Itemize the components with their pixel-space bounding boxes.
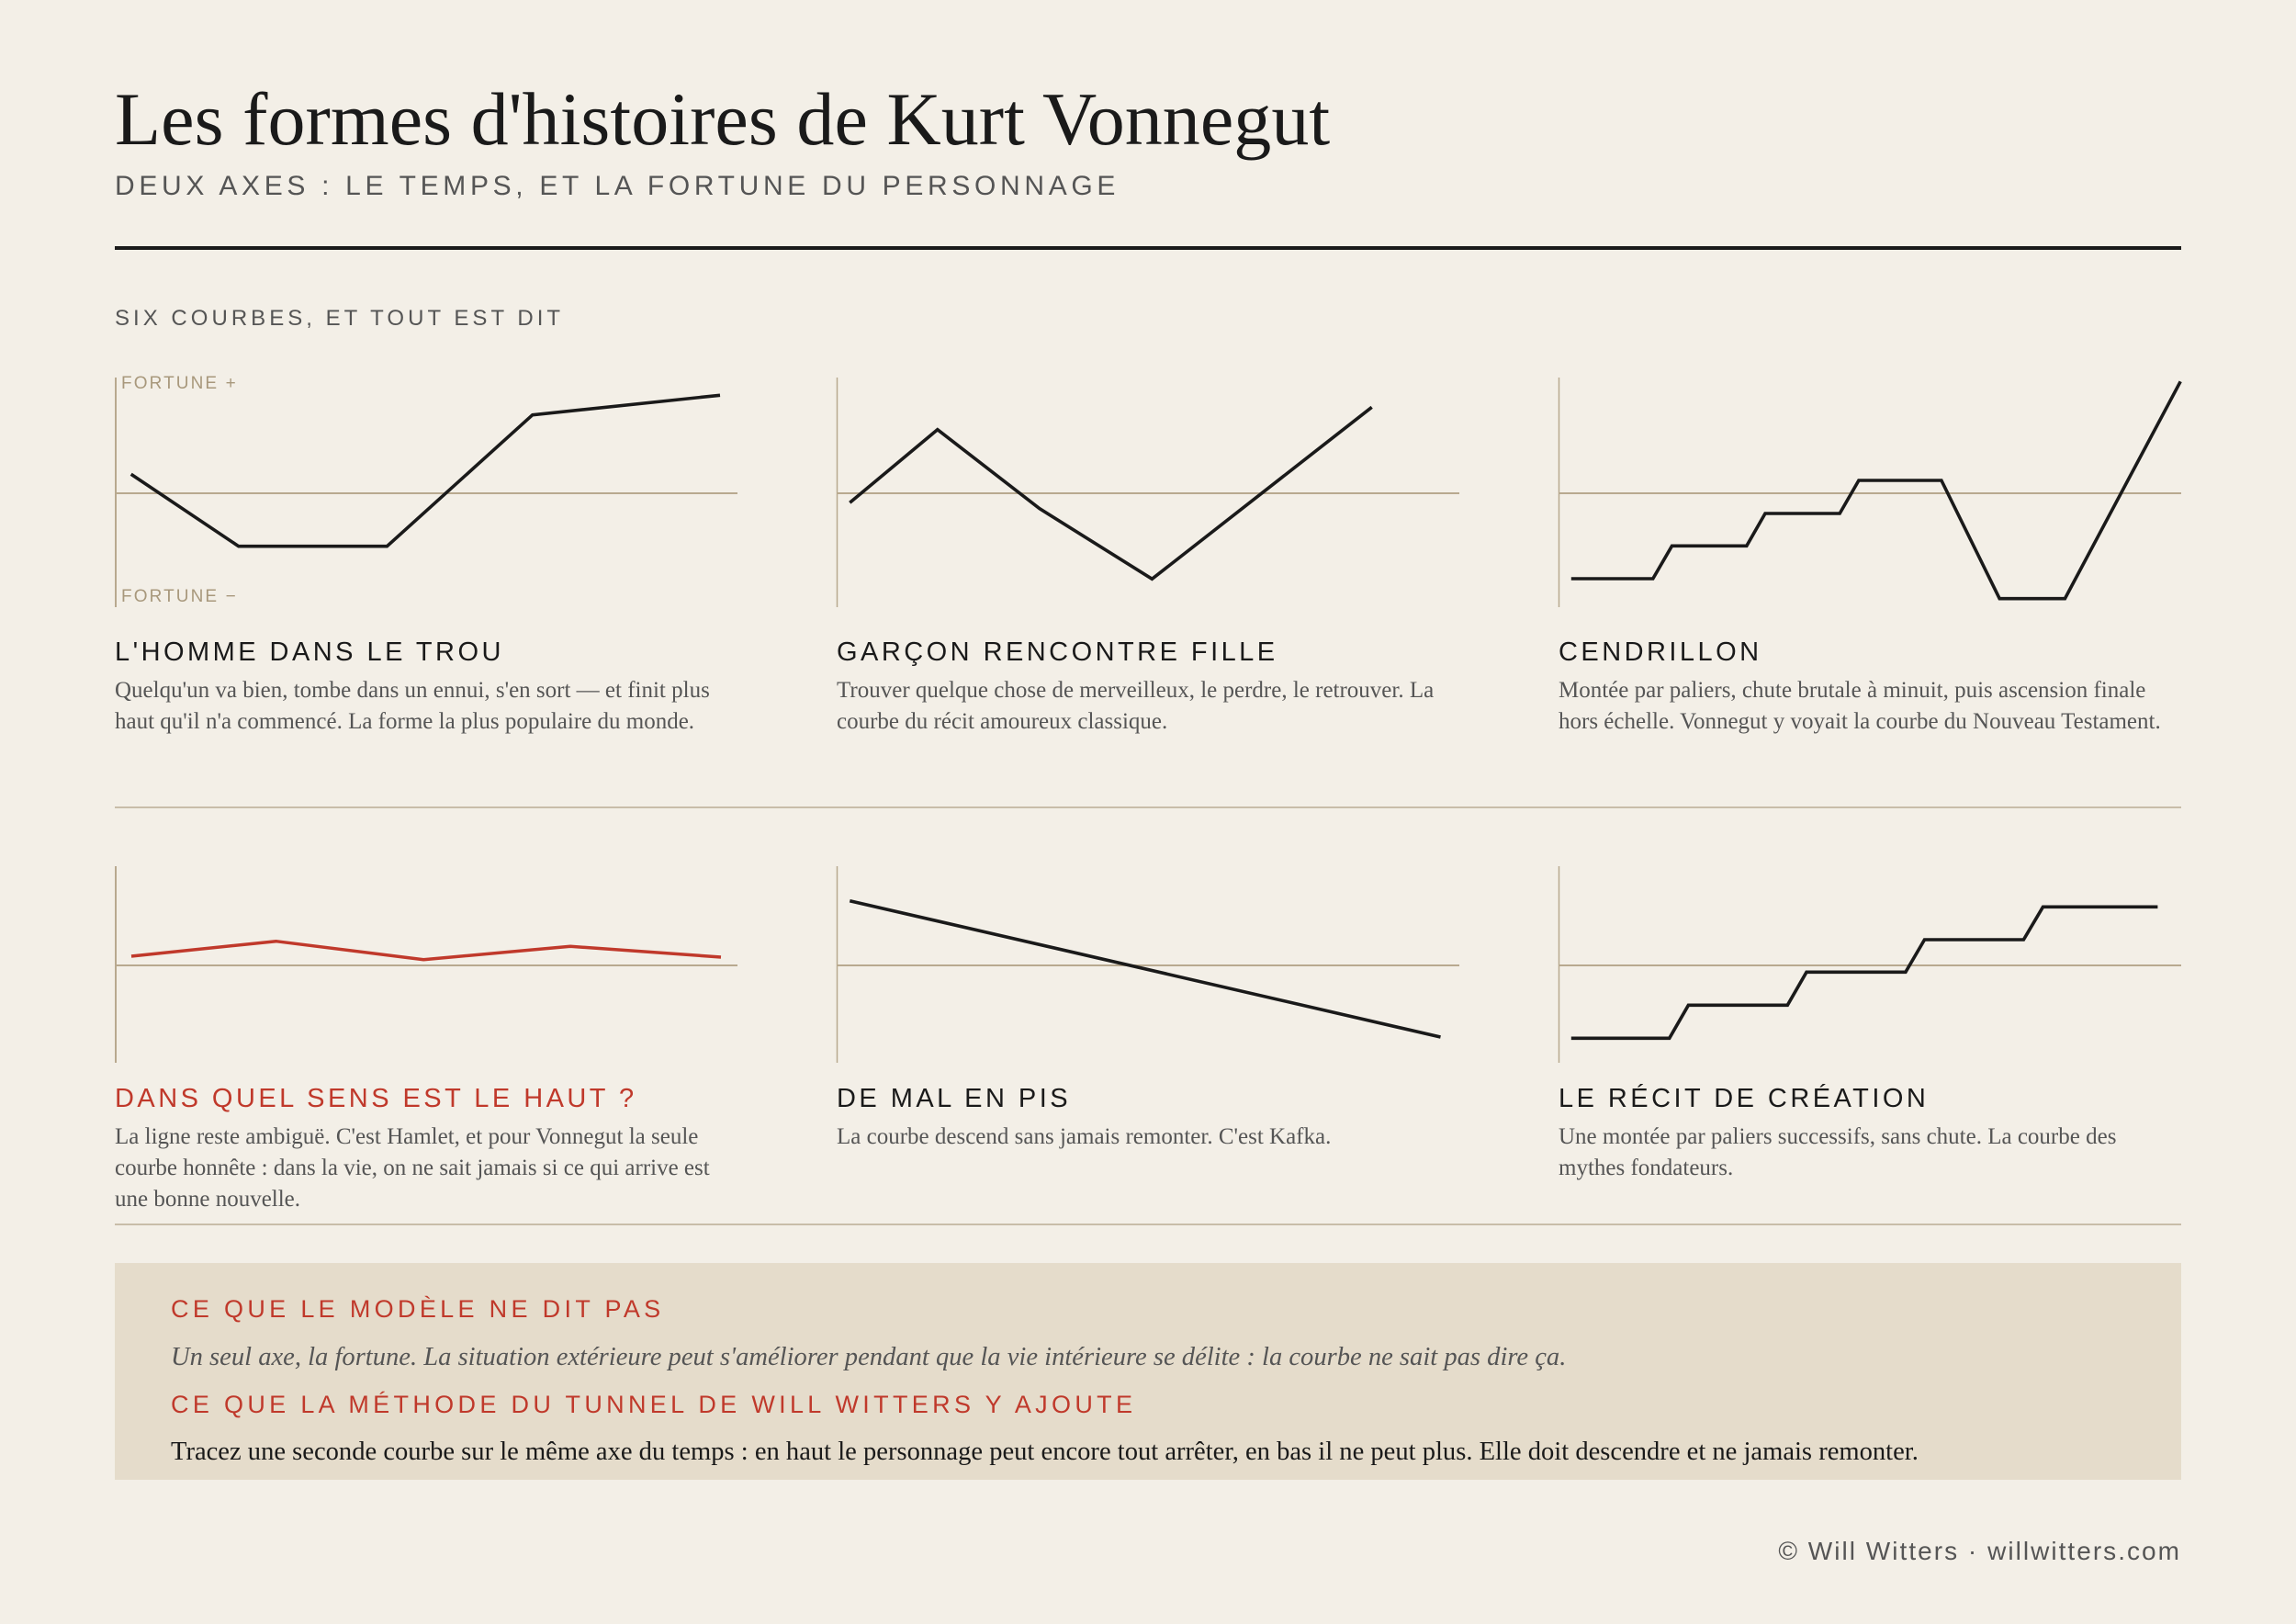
chart: Cendrillon curve <box>1558 378 2182 607</box>
footer credit: © Will Witters · willwitters.com <box>1778 1537 2181 1565</box>
axes <box>837 866 1459 1063</box>
panel: Cendrillon <box>1558 378 2182 734</box>
curve <box>1571 381 2180 599</box>
card heading: L'HOMME DANS LE TROU <box>115 637 504 667</box>
card description: La ligne reste ambiguë. C'est Hamlet, et pour Vonnegut la seule <box>115 1124 698 1149</box>
axes <box>1559 378 2181 607</box>
chart: L'homme dans le trou curve <box>115 378 737 607</box>
chart: De mal en pis curve <box>836 866 1459 1063</box>
card description: La courbe descend sans jamais remonter. C'est Kafka. <box>837 1124 1331 1149</box>
callout heading: tunnel method: CE QUE LA MÉTHODE DU TUNNEL DE WILL WITTERS Y AJOUTE <box>171 1391 1136 1418</box>
axis label: fortune plus: FORTUNE + <box>121 374 238 393</box>
section heading: SIX COURBES, ET TOUT EST DIT <box>115 306 564 331</box>
card heading: LE RÉCIT DE CRÉATION <box>1559 1084 1929 1113</box>
chart: Hamlet curve <box>115 866 737 1063</box>
card description: courbe du récit amoureux classique. <box>837 709 1167 734</box>
curve <box>850 901 1440 1037</box>
row divider <box>115 806 2181 808</box>
callout panel <box>115 1263 2181 1480</box>
card heading: DE MAL EN PIS <box>837 1084 1071 1113</box>
callout text: limits of the model: Un seul axe, la fortune. La situation extérieure peut s'améliorer pendant que la vie intérieure se délite : la courbe ne sait pas dire ça. <box>171 1343 1566 1371</box>
card heading: DANS QUEL SENS EST LE HAUT ? <box>115 1084 637 1113</box>
axes <box>1559 866 2181 1063</box>
callout text: tunnel method: Tracez une seconde courbe sur le même axe du temps : en haut le personnage peut encore tout arrêter, en bas il ne peut plus. Elle doit descendre et ne jamais remonter. <box>171 1438 1919 1466</box>
panel: De mal en pis <box>836 866 1459 1149</box>
header rule <box>115 246 2181 250</box>
card description: haut qu'il n'a commencé. La forme la plus populaire du monde. <box>115 709 694 734</box>
curve <box>131 395 720 547</box>
lower divider <box>115 1224 2181 1225</box>
card description: une bonne nouvelle. <box>115 1187 300 1212</box>
card description: mythes fondateurs. <box>1559 1156 1733 1180</box>
card heading: GARÇON RENCONTRE FILLE <box>837 637 1278 667</box>
card description <box>1559 1124 2116 1180</box>
axis label: fortune minus: FORTUNE − <box>121 587 238 606</box>
card description <box>115 678 710 734</box>
panel: Garçon rencontre fille <box>836 378 1459 734</box>
curve <box>1571 907 2157 1038</box>
panel: L'homme dans le trou <box>115 374 737 734</box>
title: Les formes d'histoires de Kurt Vonnegut <box>115 77 1330 161</box>
curve <box>131 942 721 960</box>
card heading: CENDRILLON <box>1559 637 1762 667</box>
card description: Quelqu'un va bien, tombe dans un ennui, s'en sort — et finit plus <box>115 678 710 703</box>
card description <box>115 1124 710 1212</box>
panel: Le récit de création <box>1558 866 2181 1180</box>
curve <box>850 407 1372 579</box>
callout heading: limits of the model: CE QUE LE MODÈLE NE DIT PAS <box>171 1295 665 1323</box>
axes <box>115 378 737 607</box>
card description: Une montée par paliers successifs, sans chute. La courbe des <box>1559 1124 2116 1149</box>
axes <box>115 866 737 1063</box>
axes <box>837 378 1459 607</box>
card description: Montée par paliers, chute brutale à minuit, puis ascension finale <box>1559 678 2145 703</box>
chart: Le récit de création curve <box>1558 866 2181 1063</box>
card description: hors échelle. Vonnegut y voyait la courbe du Nouveau Testament. <box>1559 709 2161 734</box>
panel: Dans quel sens est le haut <box>115 866 737 1212</box>
card description: courbe honnête : dans la vie, on ne sait jamais si ce qui arrive est <box>115 1156 710 1180</box>
chart: Garçon rencontre fille curve <box>836 378 1459 607</box>
card description <box>1559 678 2161 734</box>
subtitle: DEUX AXES : LE TEMPS, ET LA FORTUNE DU PERSONNAGE <box>115 171 1120 201</box>
card description <box>837 678 1434 734</box>
card description: Trouver quelque chose de merveilleux, le perdre, le retrouver. La <box>837 678 1434 703</box>
